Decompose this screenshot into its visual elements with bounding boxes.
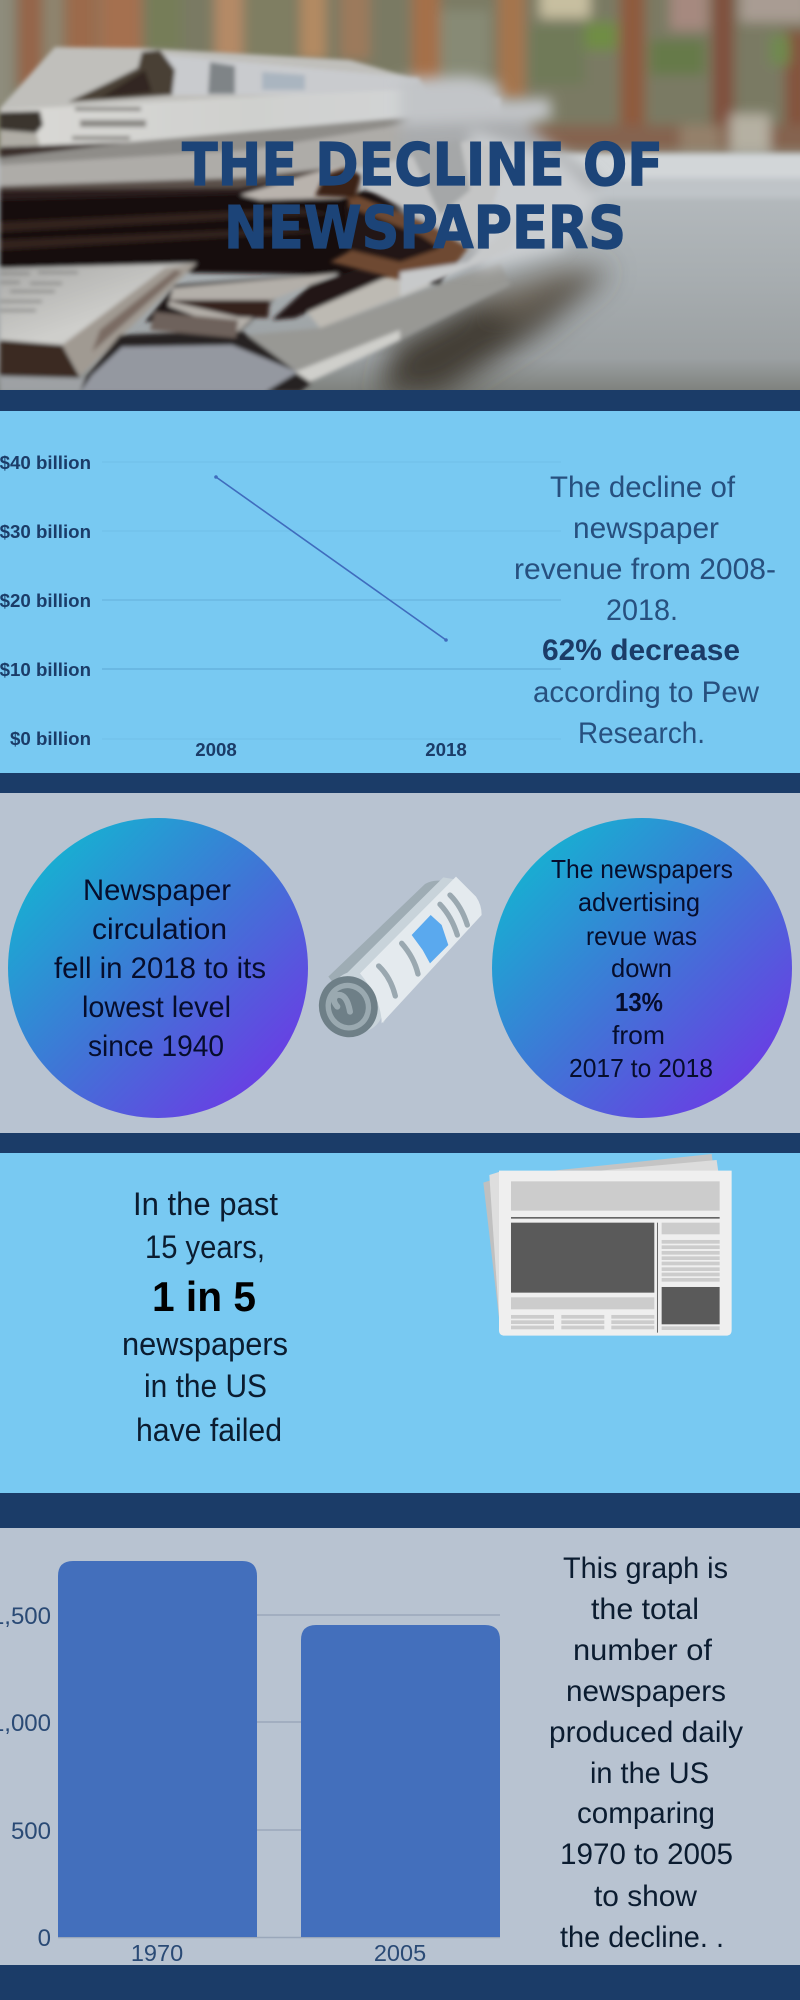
stat text block: have failed: [136, 1412, 282, 1448]
circle: advertising stat: The newspapers: [551, 854, 733, 884]
graph explanation text: comparing: [577, 1797, 715, 1830]
circle: circulation stat: fell in 2018 to its: [54, 952, 266, 985]
line chart: revenue 2008-2018: $0 billion: [10, 728, 91, 749]
title: THE DECLINE OF: [182, 130, 663, 199]
revenue text block: The decline of: [550, 471, 736, 504]
stat text block: [122, 1186, 288, 1448]
circle: circulation stat: Newspaper: [83, 874, 231, 907]
revenue text block: revenue from 2008-: [514, 553, 776, 586]
circle: advertising stat: 2017 to 2018: [569, 1053, 713, 1083]
graph explanation text: This graph is: [563, 1552, 728, 1585]
bar chart: 1970 vs 2005: 0: [38, 1925, 51, 1952]
line chart: revenue 2008-2018: 2018: [425, 739, 467, 760]
circle: advertising stat: 13%: [615, 987, 663, 1017]
bar chart: 1970 vs 2005: [0, 1561, 500, 1966]
title: NEWSPAPERS: [224, 193, 626, 262]
line chart: revenue 2008-2018: $20 billion: [0, 590, 91, 611]
title: [182, 130, 663, 262]
graph explanation text: to show: [594, 1880, 697, 1913]
panel: circulation and advertising: [0, 793, 800, 1133]
panel: 1 in 5 newspapers: [0, 1153, 800, 1493]
revenue text block: [514, 471, 776, 750]
circle: circulation stat: circulation: [92, 913, 227, 946]
circle: circulation stat: [8, 818, 308, 1118]
revenue text block: Research.: [578, 717, 705, 750]
panel: revenue decline: [0, 411, 800, 773]
circle: circulation stat: since 1940: [88, 1030, 224, 1063]
stat text block: in the US: [144, 1368, 267, 1404]
bar chart: 1970 vs 2005: 1970: [131, 1940, 183, 1966]
circle: advertising stat: revue was: [586, 921, 697, 951]
graph explanation text: 1970 to 2005: [560, 1838, 733, 1871]
graph explanation text: the decline. .: [560, 1921, 724, 1954]
graph explanation text: [549, 1552, 743, 1954]
circle: circulation stat: lowest level: [82, 991, 231, 1024]
graph explanation text: number of: [573, 1634, 713, 1667]
graph explanation text: in the US: [590, 1757, 709, 1790]
hero photo: stacked newspapers: [0, 0, 800, 395]
revenue text block: 62% decrease: [542, 634, 740, 667]
circle: advertising stat: [492, 818, 792, 1118]
stat text block: 1 in 5: [152, 1273, 256, 1320]
stat text block: newspapers: [122, 1326, 288, 1362]
icon: rolled newspaper: [311, 877, 482, 1045]
icon: flat newspaper: [483, 1154, 732, 1336]
line chart: revenue 2008-2018: $30 billion: [0, 521, 91, 542]
bar chart: 1970 vs 2005: 2005: [374, 1940, 426, 1966]
graph explanation text: newspapers: [566, 1675, 726, 1708]
revenue text block: according to Pew: [533, 676, 759, 709]
stat text block: In the past: [133, 1186, 278, 1222]
revenue text block: 2018.: [606, 594, 678, 627]
line chart: revenue 2008-2018: [0, 452, 561, 760]
line chart: revenue 2008-2018: $40 billion: [0, 452, 91, 473]
circle: advertising stat: down: [611, 953, 672, 983]
bar chart: 1970 vs 2005: 500: [11, 1818, 51, 1845]
panel: daily newspaper totals: [0, 1528, 800, 1966]
circle: advertising stat: from: [612, 1020, 665, 1050]
revenue text block: newspaper: [573, 512, 719, 545]
line chart: revenue 2008-2018: $10 billion: [0, 659, 91, 680]
stat text block: 15 years,: [145, 1229, 265, 1265]
line chart: revenue 2008-2018: 2008: [195, 739, 237, 760]
graph explanation text: the total: [591, 1593, 699, 1626]
graph explanation text: produced daily: [549, 1716, 743, 1749]
circle: advertising stat: advertising: [578, 887, 700, 917]
